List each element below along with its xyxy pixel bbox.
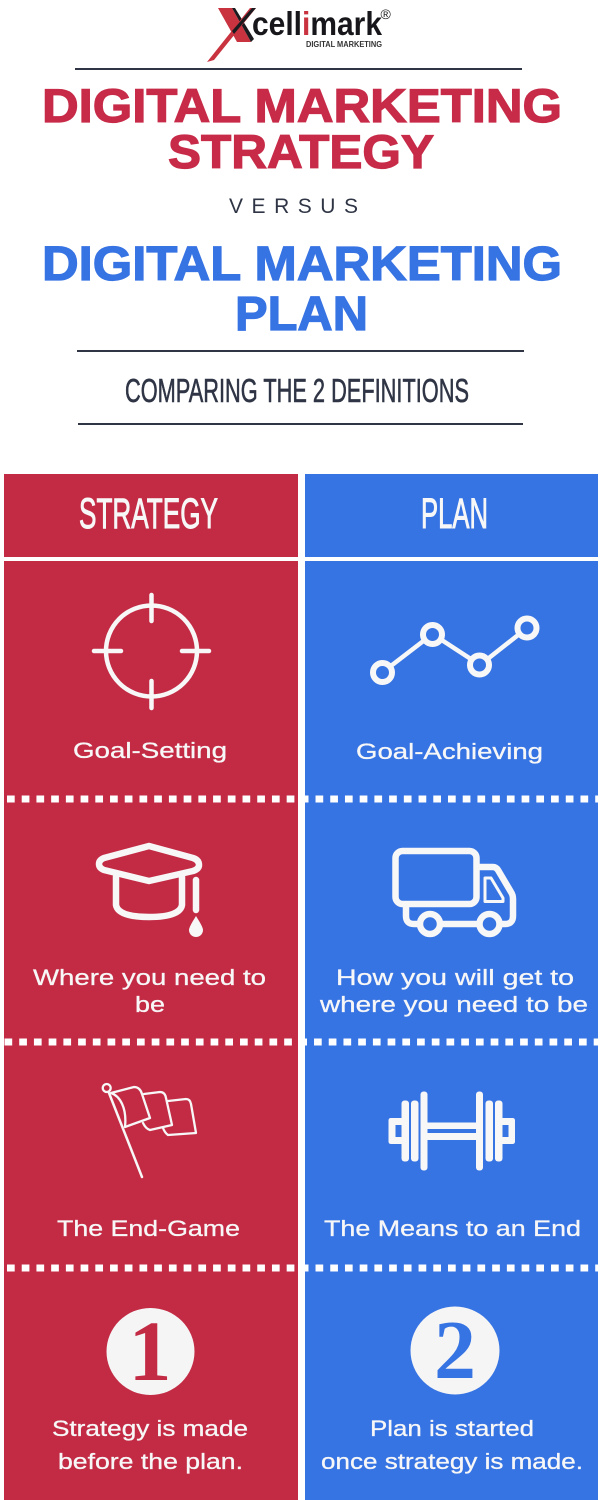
number badge 1: 1 bbox=[128, 1303, 172, 1399]
text: the end-game: The End-Game bbox=[57, 1216, 240, 1241]
text: plan is started once strategy is made bbox=[321, 1416, 583, 1474]
number badge 1 bbox=[106, 1303, 194, 1399]
text: how you will get to where you need to be: How you will get to bbox=[336, 965, 574, 990]
text: strategy is made before the plan bbox=[52, 1416, 248, 1474]
text: goal-achieving: Goal-Achieving bbox=[356, 739, 543, 764]
text: where you need to be: Where you need to bbox=[33, 965, 266, 990]
title: digital marketing strategy: DIGITAL MARKETING bbox=[42, 79, 562, 132]
logo: Xcellimark: DIGITAL MARKETING bbox=[306, 40, 382, 49]
icon: graduation cap bbox=[99, 846, 203, 937]
panel: strategy column bbox=[4, 474, 298, 1500]
title: digital marketing plan: PLAN bbox=[235, 288, 368, 341]
divider line top bbox=[75, 68, 522, 70]
number badge 2 bbox=[410, 1304, 500, 1397]
divider line middle bbox=[77, 350, 524, 352]
text: plan is started once strategy is made: Plan is started bbox=[370, 1416, 534, 1441]
text: strategy is made before the plan: before the plan. bbox=[58, 1449, 243, 1474]
strategy body background bbox=[4, 561, 298, 1500]
title: digital marketing strategy bbox=[42, 79, 562, 178]
text: goal-setting: Goal-Setting bbox=[73, 738, 227, 763]
versus label: VERSUS bbox=[229, 195, 358, 218]
title: digital marketing strategy: STRATEGY bbox=[168, 125, 434, 178]
strategy header bbox=[4, 474, 298, 557]
text: the means to an end: The Means to an End bbox=[324, 1216, 581, 1241]
plan header: PLAN bbox=[421, 490, 488, 538]
title: digital marketing plan bbox=[42, 238, 562, 341]
plan body background bbox=[305, 561, 598, 1500]
text: strategy is made before the plan: Strategy is made bbox=[52, 1416, 248, 1441]
text: how you will get to where you need to be bbox=[319, 965, 588, 1017]
icon: truck bbox=[396, 851, 513, 934]
plan header bbox=[305, 474, 598, 557]
text: where you need to be: be bbox=[135, 992, 165, 1017]
icon: dumbbell bbox=[388, 1092, 515, 1170]
strategy header: STRATEGY bbox=[79, 490, 218, 538]
panel: plan column bbox=[305, 474, 598, 1500]
logo: Xcellimark: cellimark bbox=[252, 5, 383, 42]
icon: flag bbox=[103, 1084, 196, 1177]
divider line bottom bbox=[78, 423, 523, 425]
logo: Xcellimark bbox=[207, 5, 392, 62]
icon: crosshair target bbox=[94, 595, 209, 708]
number badge 2: 2 bbox=[434, 1304, 476, 1397]
title: digital marketing plan: DIGITAL MARKETING bbox=[42, 238, 562, 291]
logo: Xcellimark: ® bbox=[380, 6, 392, 22]
icon: line chart bbox=[373, 618, 536, 682]
text: plan is started once strategy is made: once strategy is made. bbox=[321, 1449, 583, 1474]
text: how you will get to where you need to be: where you need to be bbox=[319, 992, 588, 1017]
text: where you need to be bbox=[33, 965, 266, 1017]
